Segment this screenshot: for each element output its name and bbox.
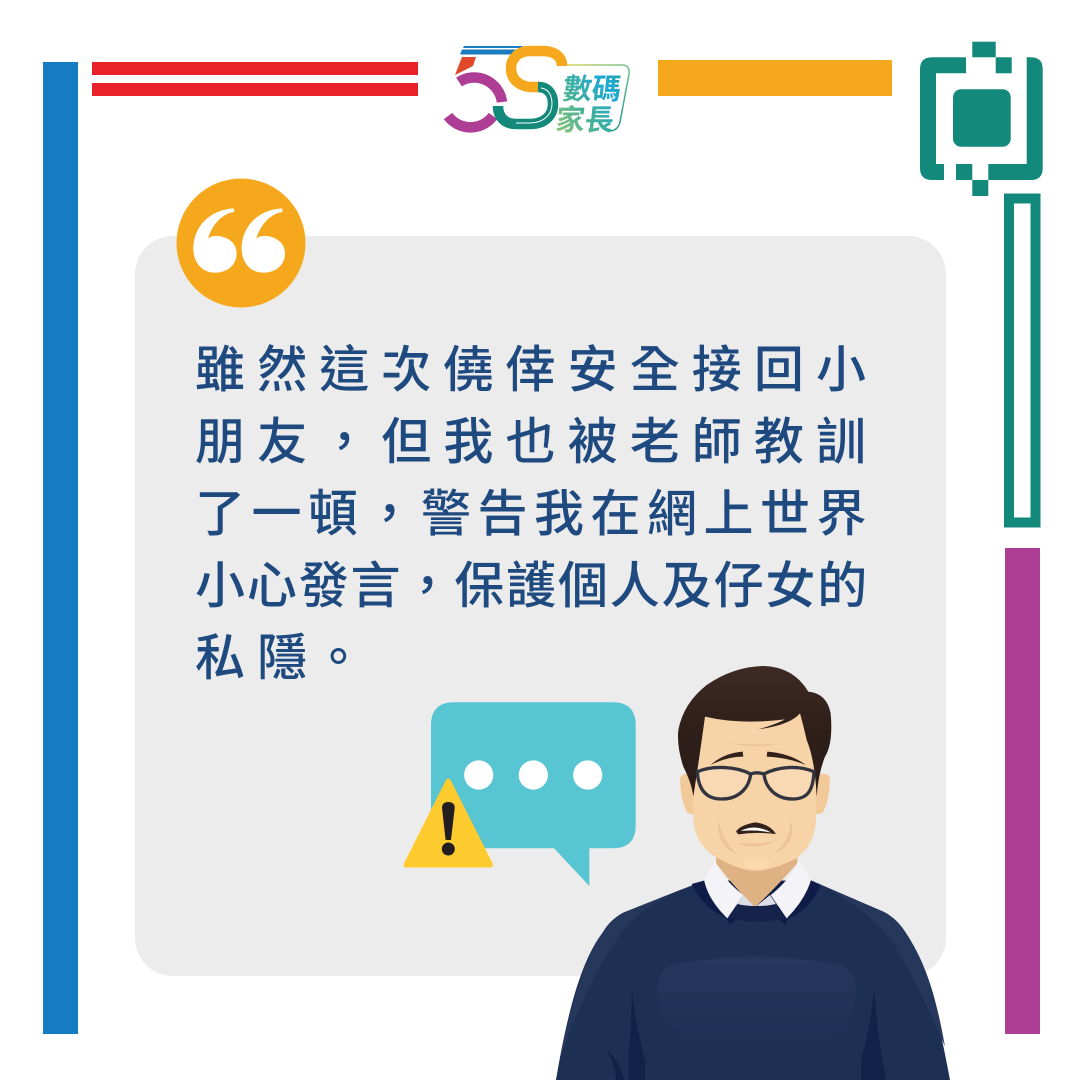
logo: teal curve <box>498 87 553 124</box>
glasses <box>697 767 814 799</box>
logo: magenta five <box>448 78 502 127</box>
logo: wordmark: 家長 <box>554 104 616 137</box>
sweater neckband <box>729 904 785 922</box>
logo: orange curve <box>511 51 562 87</box>
ears <box>680 774 695 814</box>
shirt under collar <box>736 895 777 907</box>
orange bar <box>658 60 892 96</box>
quote text: 了一頓，警告我在網上世界 <box>195 474 873 546</box>
logo: blue stripes <box>460 46 523 54</box>
neck <box>716 850 797 907</box>
purple side bar <box>1005 548 1040 1034</box>
icon: teal pixel frame <box>920 42 1043 196</box>
quote text <box>195 330 878 690</box>
face <box>693 700 816 871</box>
logo: red wedge <box>455 57 476 75</box>
blue side bar <box>43 62 78 1034</box>
red double bar <box>92 62 418 96</box>
quote text: 小心發言，保護個人及仔女的 <box>195 546 869 618</box>
icon: quotation mark badge <box>176 178 306 308</box>
mouth <box>736 822 776 834</box>
teal outlined bar <box>1009 198 1036 522</box>
illustration: worried man <box>556 666 950 1080</box>
face creases <box>718 743 792 854</box>
logo: 55 digital parents <box>448 46 629 137</box>
shirt collar <box>704 861 743 918</box>
quote text: 朋友，但我也被老師教訓 <box>195 402 878 474</box>
logo: wordmark <box>554 73 623 137</box>
logo: frame <box>566 65 629 131</box>
sweater <box>556 881 950 1080</box>
panel: quote background <box>135 236 946 976</box>
logo: wordmark: 數碼 <box>561 73 623 106</box>
hair <box>678 666 831 797</box>
icon: speech bubble <box>431 702 636 886</box>
quote text: 雖然這次僥倖安全接回小 <box>195 330 878 402</box>
icon: warning triangle <box>406 781 491 865</box>
quote text: 私隱。 <box>195 618 375 690</box>
eyebrows <box>711 752 743 765</box>
